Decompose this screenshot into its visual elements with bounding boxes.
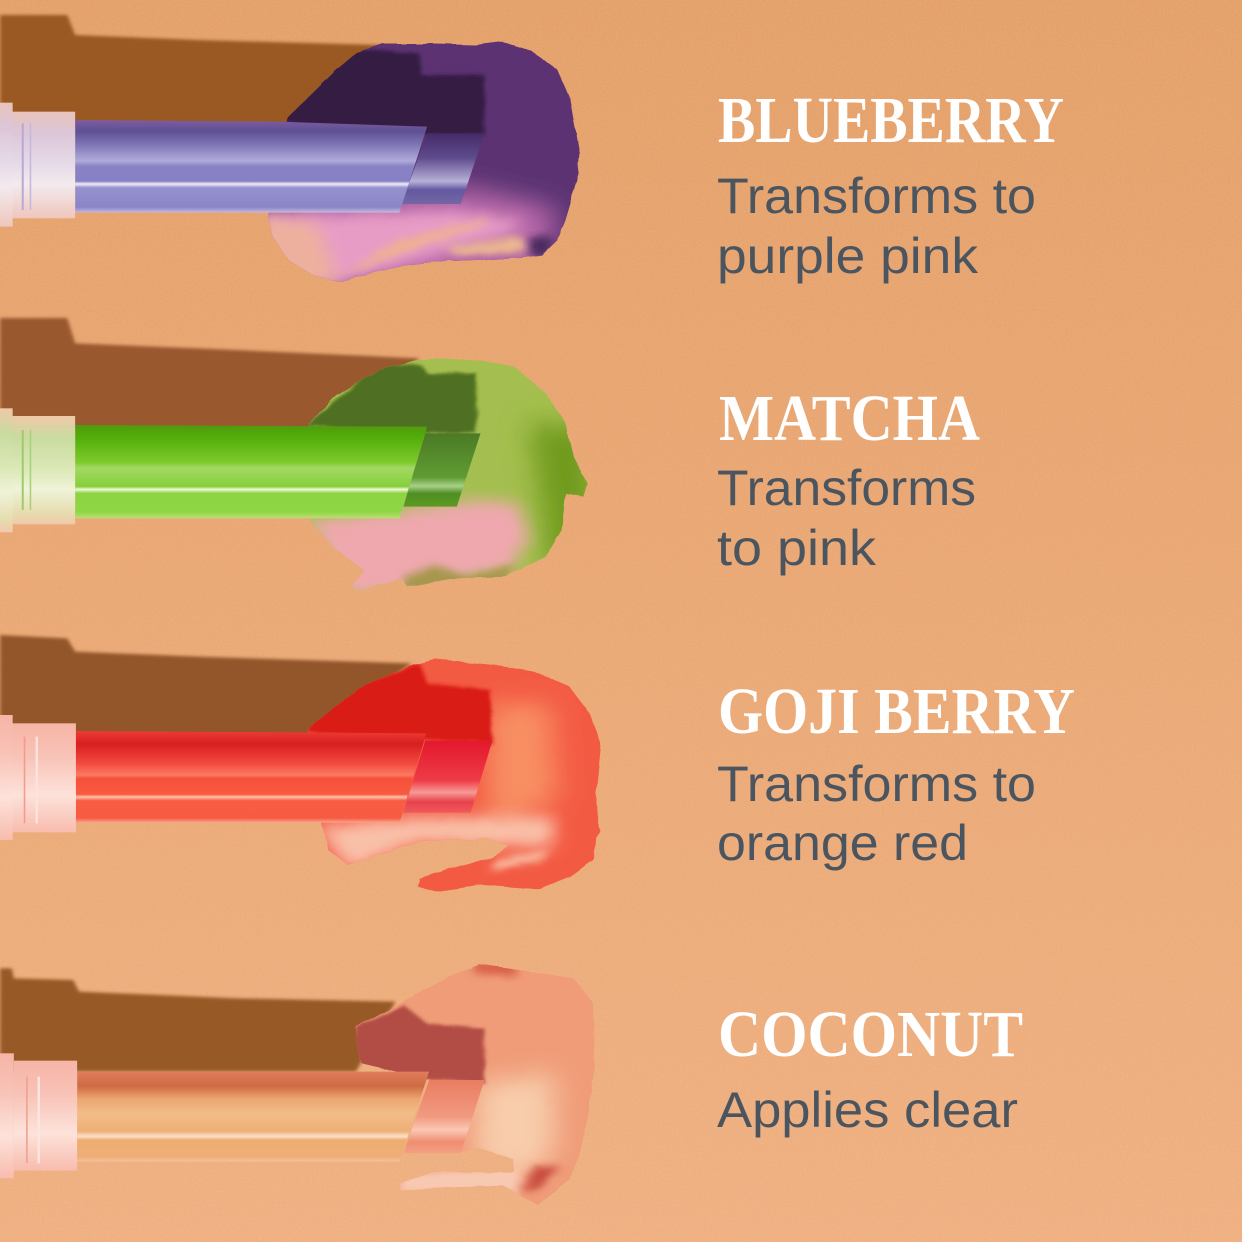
cap [0, 103, 75, 227]
text block: blueberry [717, 84, 1064, 284]
colour swatch [307, 658, 601, 892]
text block: coconut [717, 998, 1023, 1138]
description: coconut: Applies clear [717, 1082, 1018, 1138]
text block: goji berry [717, 675, 1075, 871]
lip balm tip [403, 741, 492, 813]
panel: matcha balm product [0, 318, 605, 603]
heading: coconut: COCONUT [718, 998, 1023, 1071]
cast shadow [0, 635, 411, 737]
description: goji berry: Transforms to [717, 756, 1036, 812]
colour swatch [268, 41, 580, 282]
cap [0, 1053, 77, 1178]
cap [0, 715, 76, 840]
cast shadow [0, 318, 419, 430]
lip balm tip [401, 133, 484, 204]
lip balm stick [77, 1072, 429, 1162]
panel: blueberry balm product [0, 15, 593, 293]
lip balm tip [403, 433, 481, 507]
heading: matcha: MATCHA [719, 382, 980, 455]
description: matcha: to pink [717, 520, 877, 576]
cast shadow [0, 15, 380, 127]
colour swatch [308, 358, 588, 591]
colour swatch [356, 964, 595, 1205]
heading: blueberry: BLUEBERRY [718, 84, 1064, 157]
text block: matcha [717, 382, 980, 576]
description: blueberry: purple pink [717, 228, 979, 284]
panel: coconut balm product [0, 964, 595, 1205]
lip balm stick [75, 120, 427, 213]
description: matcha: Transforms [717, 460, 976, 516]
description: goji berry: orange red [717, 815, 968, 871]
lip balm tip [403, 1080, 484, 1153]
description: blueberry: Transforms to [717, 168, 1036, 224]
heading: goji berry: GOJI BERRY [718, 675, 1075, 748]
lip balm stick [75, 425, 427, 518]
panel: goji berry balm product [0, 635, 613, 903]
cap [0, 408, 75, 532]
lip balm stick [75, 731, 426, 823]
cast shadow [0, 968, 396, 1072]
